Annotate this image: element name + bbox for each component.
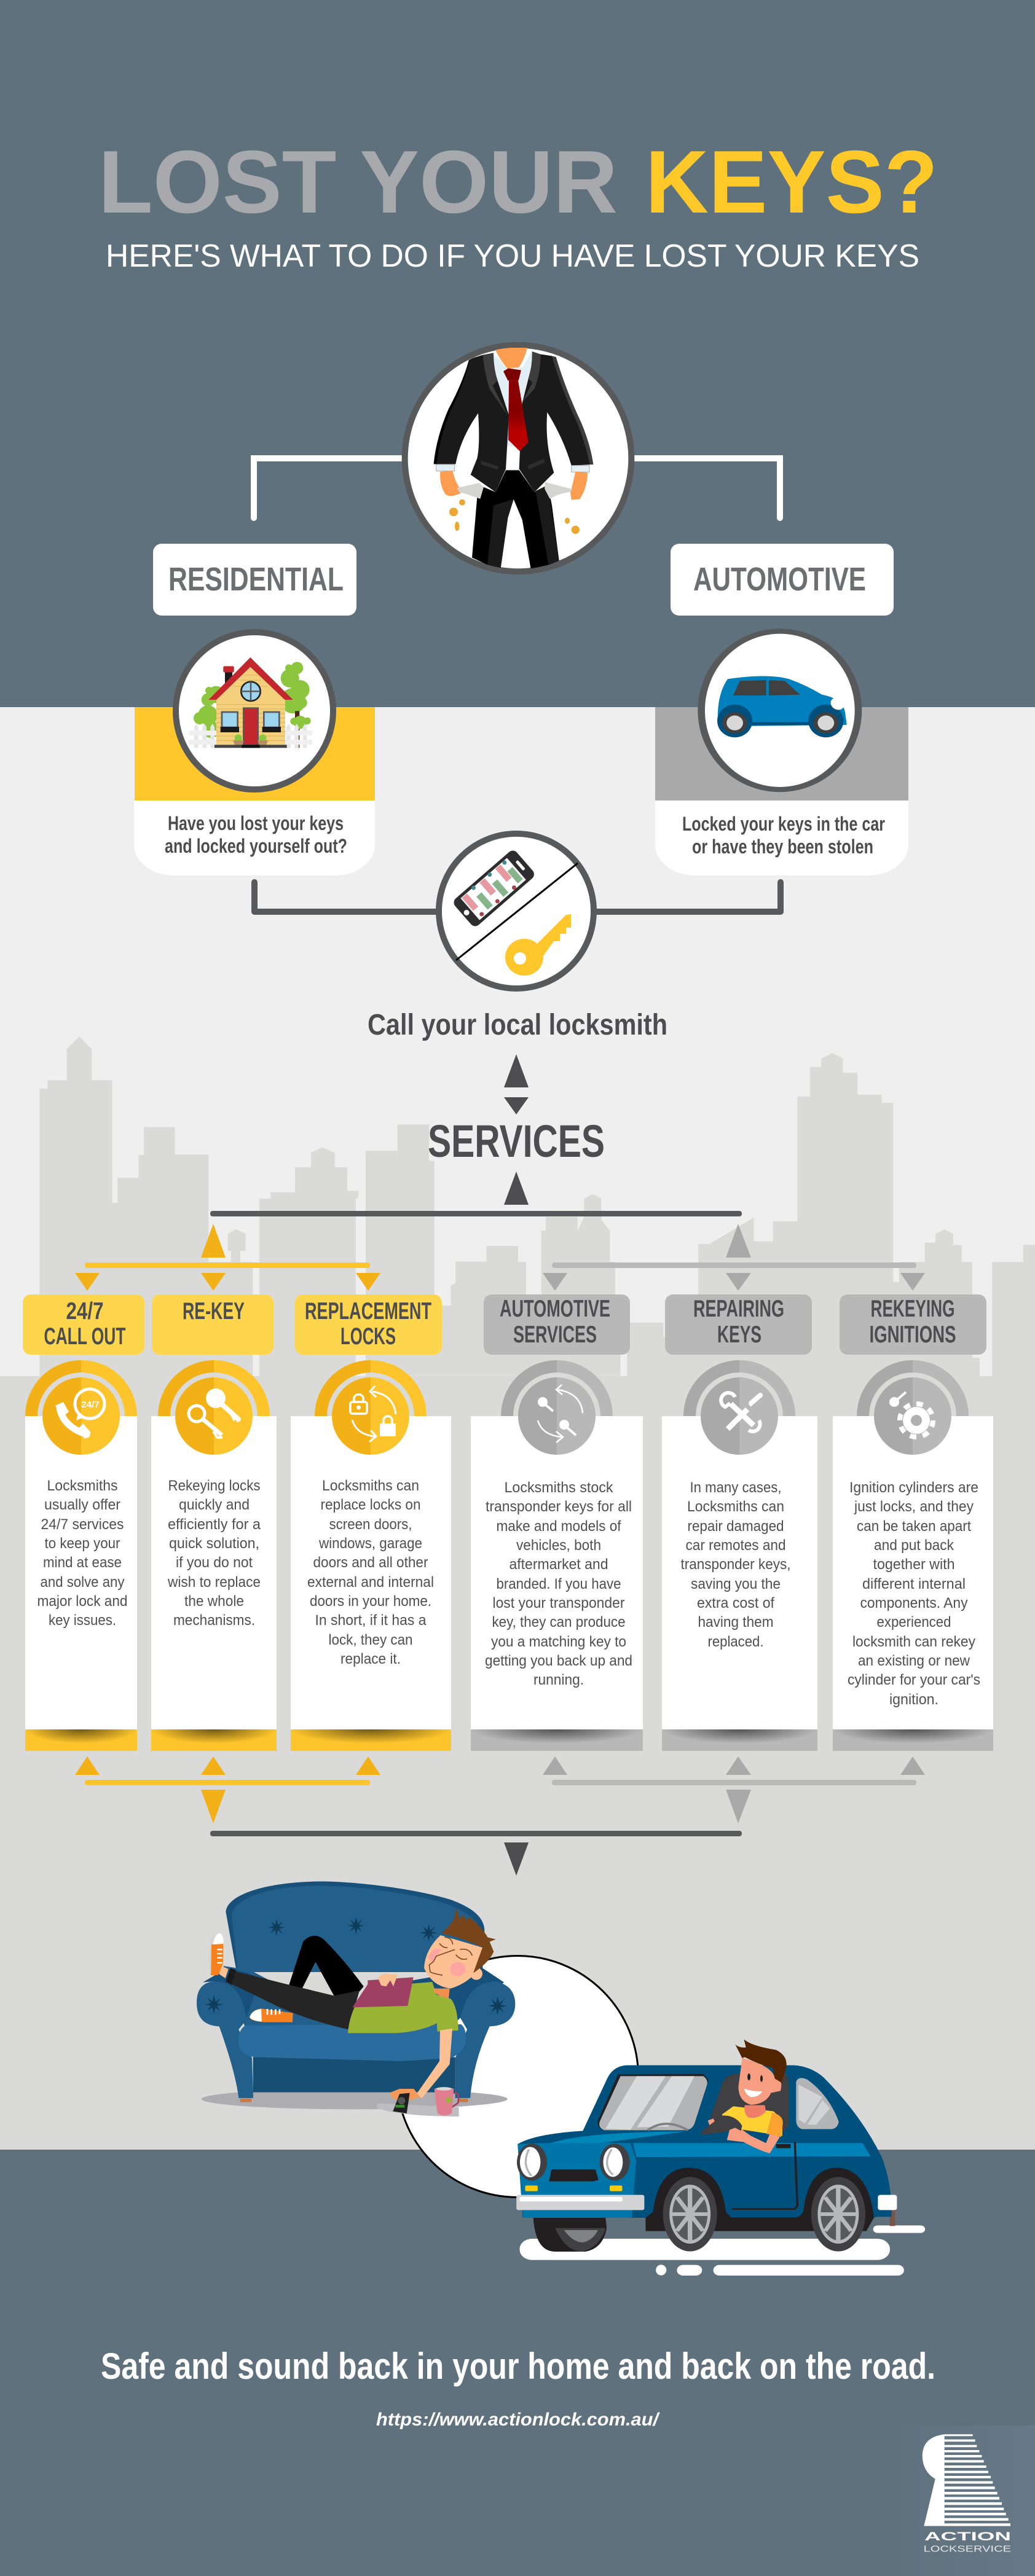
arrow: down to services [504, 1097, 529, 1114]
text: re-key description: if you do not [176, 1554, 253, 1571]
text: rekeying ignitions description: can be taken apart [857, 1518, 971, 1535]
panel: residential question: and locked yourself out? [165, 835, 347, 857]
panel: automotive question: or have they been stolen [692, 836, 873, 858]
panel: 24/7 call out card [25, 1360, 137, 1751]
text: 24/7 call out description: usually offer [44, 1497, 120, 1513]
connector: man to categories [254, 458, 780, 518]
panel: residential label: RESIDENTIAL [168, 561, 344, 598]
text: 24/7 call out description: mind at ease [43, 1554, 122, 1571]
label: re-key [152, 1294, 274, 1355]
text: re-key description: efficiently for a [168, 1516, 261, 1533]
text: repairing keys description: repair damaged [687, 1518, 784, 1535]
text: automotive services description: getting you back up and [485, 1653, 632, 1669]
text: automotive services description: vehicles, both [516, 1537, 601, 1554]
text: re-key description: the whole [184, 1593, 244, 1610]
text: re-key description: quick solution, [169, 1535, 259, 1552]
icon: phone and key [439, 834, 594, 989]
arrows: yellow top group [75, 1224, 380, 1291]
connector: services bar [210, 1211, 742, 1216]
arrows: grey bottom group [543, 1756, 925, 1823]
text: repairing keys description: In many cases, [690, 1479, 782, 1496]
icon: man with empty pockets [405, 345, 631, 571]
title: LOST YOUR [98, 132, 618, 232]
label: rekeying ignitions [840, 1294, 986, 1355]
text: rekeying ignitions description: ignition. [889, 1691, 939, 1708]
text: replacement locks description: external and internal [307, 1574, 434, 1591]
text: repairing keys description: extra cost of [697, 1595, 774, 1611]
label: re-key: RE-KEY [183, 1298, 245, 1325]
label: repairing keys: REPAIRING [693, 1296, 784, 1322]
text: rekeying ignitions description: together with [873, 1556, 955, 1573]
panel: automotive label [671, 544, 894, 616]
label: rekeying ignitions: REKEYING [870, 1296, 955, 1322]
icon: phone with 24/7 bubble [55, 1389, 104, 1439]
label: repairing keys [665, 1294, 812, 1355]
background: top slate section [0, 0, 1035, 707]
panel: rekeying ignitions card [833, 1360, 993, 1751]
text: 24/7 call out description: and solve any [41, 1574, 124, 1591]
icon: key and gear [889, 1392, 933, 1437]
text: repairing keys description: saving you the [691, 1576, 781, 1592]
text: automotive services description: aftermarket and [509, 1556, 608, 1573]
text: repairing keys description: Locksmiths can [687, 1498, 784, 1515]
text: repairing keys description: replaced. [708, 1634, 763, 1650]
text: repairing keys description [681, 1479, 790, 1650]
background: skyline gap fill [912, 1358, 980, 1382]
logo: action lockservice: LOCKSERVICE [924, 2544, 1011, 2554]
text: automotive services description: key, they can produce [492, 1614, 626, 1631]
text: replacement locks description: lock, they can [328, 1632, 413, 1648]
text: rekeying ignitions description: components. Any [860, 1595, 967, 1611]
icon: blue car [701, 631, 858, 789]
background: light middle section [0, 707, 1035, 1383]
text: replacement locks description: replace it. [340, 1651, 401, 1667]
panel: automotive label: AUTOMOTIVE [693, 561, 866, 598]
panel: repairing keys card [662, 1360, 817, 1751]
illustration: man sleeping on sofa [197, 1881, 515, 2116]
text: replacement locks description: screen doors, [329, 1516, 412, 1533]
website url: https://www.actionlock.com.au/ [376, 2410, 660, 2430]
arrow: up to services [504, 1172, 529, 1205]
text: replacement locks description: windows, garage [318, 1535, 422, 1552]
label: replacement locks [295, 1294, 442, 1355]
text: automotive services description: you a matching key to [491, 1634, 626, 1650]
text: re-key description: wish to replace [167, 1574, 261, 1591]
connector: bottom bar [210, 1831, 742, 1836]
text: rekeying ignitions description: just locks, and they [854, 1498, 974, 1515]
panel: automotive question: Locked your keys in the car [682, 813, 885, 835]
text: replacement locks description: In short, if it has a [315, 1612, 427, 1629]
text: 24/7 call out description: to keep your [44, 1535, 120, 1552]
label: 24/7 call out: 24/7 [66, 1298, 103, 1325]
icon: keys with swap arrows [538, 1385, 583, 1443]
title: KEYS? [645, 132, 938, 232]
text: re-key description: mechanisms. [173, 1612, 255, 1629]
arrows: yellow bottom group [75, 1756, 380, 1823]
label: automotive services: SERVICES [513, 1321, 597, 1348]
logo: action lockservice [894, 2425, 1035, 2576]
text: automotive services description: running. [533, 1672, 584, 1688]
label: repairing keys: KEYS [717, 1321, 761, 1348]
icon: wrench and screwdriver [721, 1393, 760, 1431]
text: repairing keys description: car remotes and [686, 1537, 785, 1554]
logo: action lockservice: ACTION [924, 2531, 1011, 2543]
label: 24/7 call out: CALL OUT [44, 1323, 126, 1350]
decorative circle behind illustrations [397, 1956, 638, 2197]
subtitle: HERE'S WHAT TO DO IF YOU HAVE LOST YOUR KEYS [106, 238, 919, 274]
icon: house [176, 632, 333, 789]
background: bottom slate section [0, 2150, 1035, 2576]
text: repairing keys description: having them [698, 1614, 773, 1631]
text: replacement locks description: doors in your home. [310, 1593, 431, 1610]
text: 24/7 call out description: major lock and [37, 1593, 128, 1610]
text: rekeying ignitions description: an existing or new [858, 1653, 970, 1669]
arrow: down to outcome [504, 1842, 529, 1876]
label: rekeying ignitions: IGNITIONS [869, 1321, 956, 1348]
city skyline silhouette [39, 1036, 1035, 1388]
heading: call your local locksmith: Call your local locksmith [368, 1009, 667, 1041]
text: rekeying ignitions description: Ignition cylinders are [849, 1479, 978, 1496]
text: 24/7 call out description: Locksmiths [47, 1478, 118, 1494]
text: 24/7 call out description: 24/7 services [41, 1516, 124, 1533]
text: rekeying ignitions description: locksmith can rekey [852, 1634, 975, 1650]
label: 24/7 call out [23, 1294, 144, 1355]
text: replacement locks description: replace locks on [321, 1497, 420, 1513]
text: rekeying ignitions description: and put back [874, 1537, 954, 1554]
text: automotive services description: branded. If you have [497, 1576, 621, 1592]
label: automotive services: AUTOMOTIVE [500, 1296, 610, 1322]
arrow: up to locksmith [504, 1054, 529, 1087]
panel: residential question [134, 707, 375, 875]
heading: services: SERVICES [428, 1116, 605, 1167]
text: automotive services description [485, 1479, 632, 1688]
text: automotive services description: Locksmiths stock [504, 1479, 613, 1496]
text: re-key description: Rekeying locks [168, 1478, 261, 1494]
text: replacement locks description: doors and all other [313, 1554, 428, 1571]
arrows: grey top group [543, 1224, 925, 1291]
text: rekeying ignitions description: cylinder for your car's [848, 1672, 980, 1688]
text: automotive services description: lost your transponder [493, 1595, 624, 1611]
text: replacement locks description [307, 1478, 434, 1667]
label: automotive services [484, 1294, 630, 1355]
text: 24/7 call out description: key issues. [49, 1612, 116, 1629]
background: grey lower section [0, 1376, 1035, 2150]
text: rekeying ignitions description: experienced [876, 1614, 951, 1631]
panel: replacement locks card [291, 1360, 451, 1751]
icon: phone with 24/7 bubble: 24/7 [81, 1400, 100, 1410]
panel: automotive services card [471, 1360, 643, 1751]
label: replacement locks: LOCKS [340, 1323, 396, 1350]
panel: automotive question [655, 707, 908, 875]
text: automotive services description: transponder keys for all [486, 1498, 632, 1515]
icon: locks with swap arrows [350, 1386, 396, 1442]
panel: residential label [153, 544, 356, 616]
text: re-key description [167, 1478, 261, 1629]
illustration: man driving blue car [516, 2039, 925, 2276]
text: repairing keys description: transponder keys, [681, 1556, 790, 1573]
text: 24/7 call out description [37, 1478, 128, 1629]
panel: residential question: Have you lost your keys [168, 812, 344, 834]
icon: two keys [189, 1388, 238, 1438]
text: rekeying ignitions description [848, 1479, 980, 1708]
panel: re-key card [151, 1360, 277, 1751]
text: replacement locks description: Locksmiths can [322, 1478, 419, 1494]
label: replacement locks: REPLACEMENT [305, 1298, 431, 1325]
text: re-key description: quickly and [179, 1497, 250, 1513]
text: automotive services description: make and models of [497, 1518, 621, 1535]
text: rekeying ignitions description: different internal [862, 1576, 966, 1592]
connector: categories to call [254, 882, 781, 912]
title [98, 132, 938, 232]
